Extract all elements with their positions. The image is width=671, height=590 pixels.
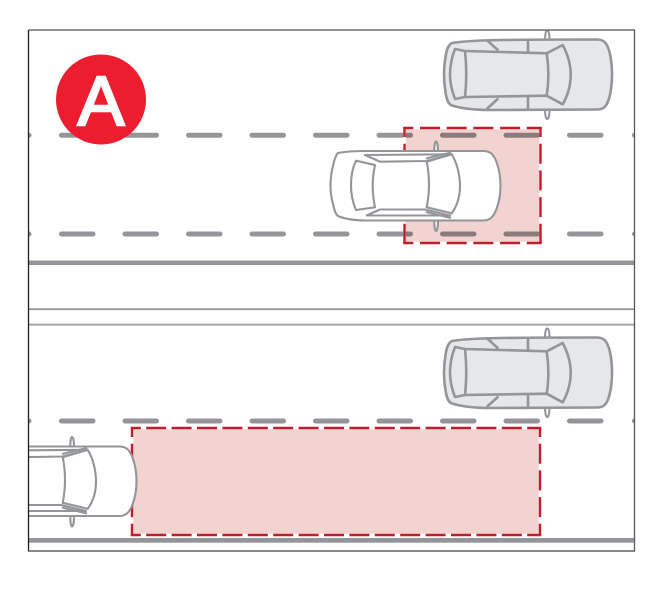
badge: letter A	[56, 54, 146, 144]
white sedan, upper lane	[330, 142, 500, 231]
panel: lower road	[0, 328, 635, 543]
lower road edge line	[28, 538, 635, 543]
panel: upper road	[28, 30, 635, 265]
separator lines between scenes	[28, 308, 635, 326]
lower highlighted gap zone	[131, 427, 541, 536]
grey SUV, lower lane	[444, 328, 612, 417]
upper lane markings	[28, 135, 635, 234]
upper road edge line	[28, 260, 635, 265]
badge: letter A: A	[78, 62, 125, 140]
white sedan, lower lane	[29, 436, 138, 528]
grey SUV, upper lane	[444, 30, 612, 119]
frame border	[28, 30, 635, 552]
upper highlighted gap zone	[403, 127, 542, 244]
lower lane markings	[28, 418, 635, 424]
